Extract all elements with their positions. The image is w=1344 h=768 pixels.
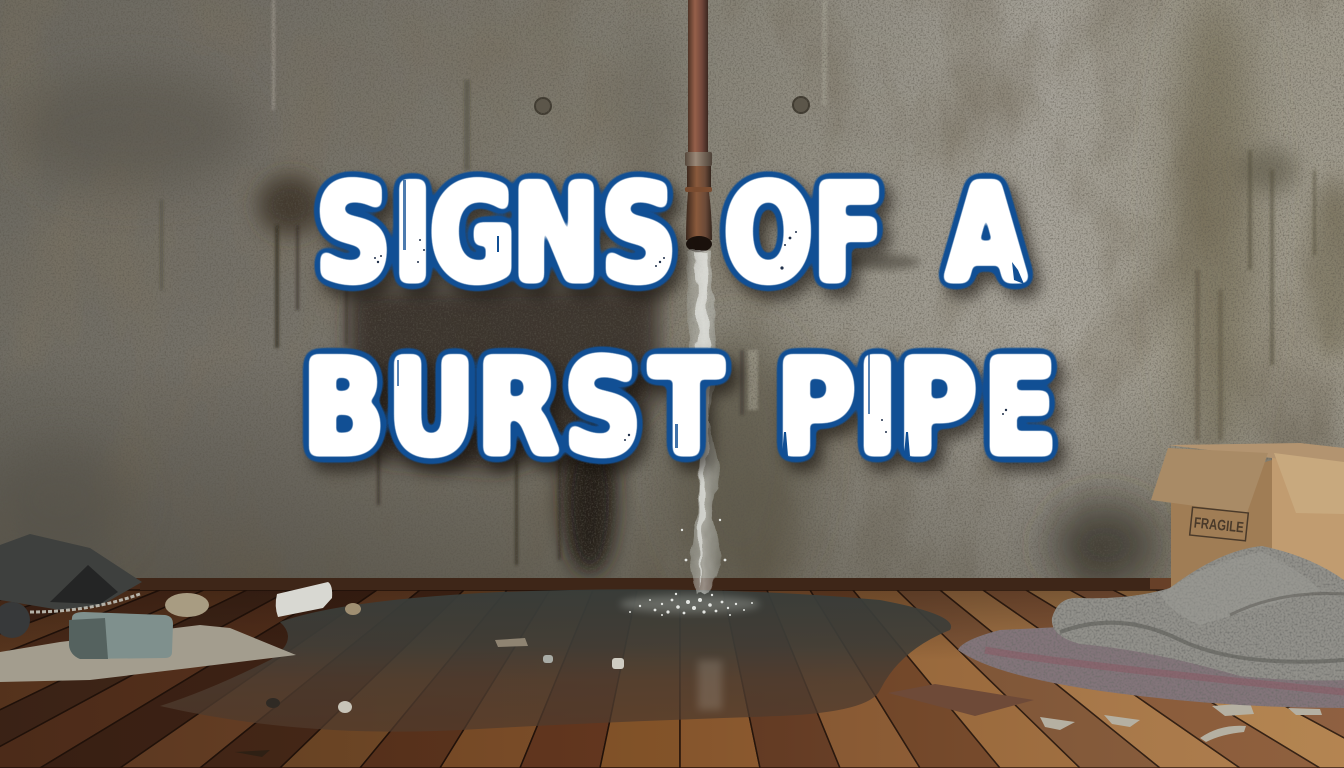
- grey blanket: [1052, 546, 1344, 680]
- grey cloth: [0, 625, 296, 682]
- box left face: [1171, 460, 1272, 600]
- title line 1: OF: [724, 156, 884, 312]
- box right face: [1272, 455, 1344, 600]
- floor planks: [0, 590, 1344, 768]
- rope bundle: [165, 593, 209, 617]
- back flap: [1168, 443, 1344, 465]
- concrete wall: [0, 0, 1344, 590]
- clutter: left side: [0, 534, 332, 682]
- teal container: [69, 612, 173, 659]
- pipe: [685, 0, 712, 252]
- bolt holes: [535, 97, 809, 114]
- cardboard box: [1151, 443, 1344, 600]
- title line 2: PIPE: [777, 333, 1057, 485]
- title speckles: [374, 231, 1007, 441]
- debris: [235, 603, 1322, 757]
- left flap: [1151, 448, 1268, 513]
- tarp fold: [50, 565, 118, 604]
- fragile stamp: [1190, 507, 1248, 541]
- fragile stamp: FRAGILE: [1193, 514, 1245, 537]
- title line 1: [316, 156, 1026, 312]
- right flap: [1274, 453, 1344, 514]
- title line 1: SIGNS: [316, 156, 676, 312]
- title distress marks: [397, 180, 1024, 456]
- roller: [0, 602, 30, 638]
- chain: [30, 594, 140, 612]
- dark tarp: [0, 534, 142, 610]
- title line 2: [303, 333, 1057, 485]
- wood floor: [0, 578, 1344, 768]
- white jug: [276, 582, 332, 617]
- wall stains and damp patches: [0, 0, 1344, 590]
- title line 1: A: [945, 156, 1026, 312]
- title line 2: BURST: [303, 333, 723, 485]
- fallen board: [888, 684, 1034, 716]
- baseboard: [140, 578, 1150, 590]
- rug: [958, 625, 1344, 708]
- puddle: [160, 589, 951, 732]
- water jet: [686, 252, 722, 596]
- water splash droplets: [629, 519, 753, 616]
- container side shade: [69, 618, 108, 659]
- title: [303, 156, 1057, 485]
- drip streaks on the wall: [160, 0, 1316, 565]
